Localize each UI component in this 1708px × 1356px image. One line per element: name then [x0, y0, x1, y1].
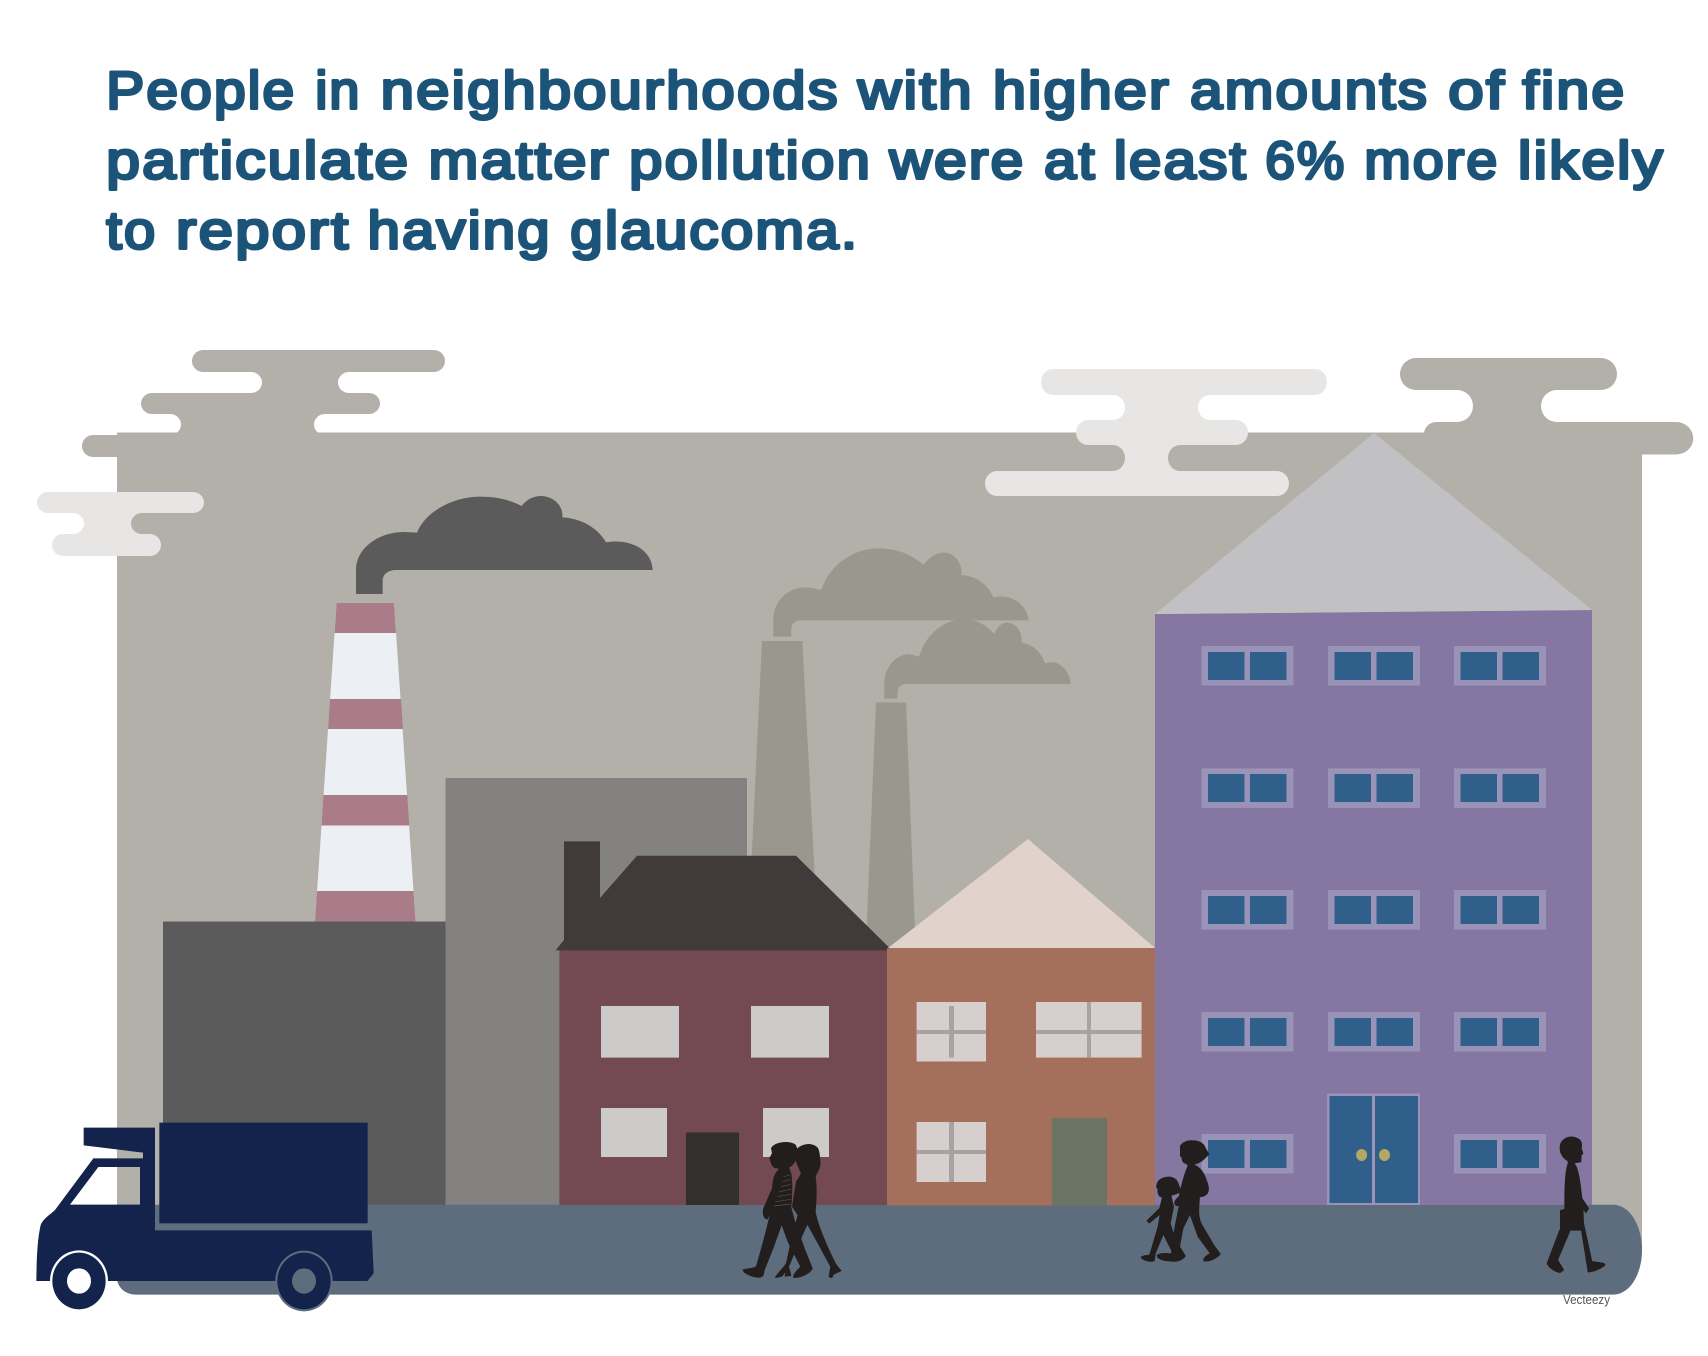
people: two women walking	[743, 1143, 841, 1277]
chimney	[564, 841, 600, 949]
title: likely	[1518, 132, 1665, 190]
roof: apartment	[1155, 433, 1592, 614]
title: particulate	[106, 132, 410, 190]
title: at	[1044, 132, 1097, 190]
person: man walking with briefcase	[1547, 1137, 1605, 1272]
title: least	[1114, 132, 1248, 190]
people: mother and child walking	[1141, 1141, 1220, 1261]
windows: apartment	[1202, 646, 1546, 1174]
striped top	[774, 1175, 791, 1206]
smoke: back plume two	[884, 619, 1071, 699]
roof: pale pink	[888, 839, 1155, 948]
credit: Vecteezy	[1563, 1292, 1610, 1307]
door: apartment double door	[1327, 1094, 1420, 1205]
door: red house	[686, 1132, 739, 1205]
house: tan brick	[887, 839, 1155, 1206]
title: with	[857, 62, 974, 120]
title: 6%	[1265, 132, 1346, 190]
title: more	[1364, 132, 1499, 190]
smokestack: back chimney, tall	[750, 641, 815, 880]
title: were	[888, 132, 1026, 190]
house: red brick	[556, 841, 892, 1205]
title: matter	[429, 132, 611, 190]
smokestack: striped chimney	[315, 603, 416, 922]
title: of	[1448, 62, 1506, 120]
smoke: back plume one	[773, 548, 1029, 637]
road	[117, 1205, 1642, 1295]
factory block: mid grey	[446, 778, 747, 1208]
title: amounts	[1190, 62, 1429, 120]
title: pollution	[629, 132, 872, 190]
cloud: grey upper left	[82, 350, 445, 457]
truck cargo box	[159, 1123, 368, 1223]
cloud: white centre	[985, 369, 1327, 496]
truck body and cab	[36, 1128, 374, 1281]
smoggy sky backdrop	[117, 432, 1642, 1250]
title: neighbourhoods	[381, 62, 840, 120]
windows: tan house	[917, 1002, 1142, 1182]
rear wheel	[275, 1251, 333, 1311]
smokestack: back chimney, short	[866, 702, 916, 955]
smoke: dark factory plume	[356, 496, 653, 594]
title: report	[176, 202, 350, 260]
title: to	[106, 202, 157, 260]
title: fine	[1522, 62, 1626, 120]
title: higher	[993, 62, 1171, 120]
title: People	[106, 62, 296, 120]
title	[106, 62, 1665, 260]
cloud: white left	[37, 492, 204, 556]
title: glaucoma.	[570, 202, 859, 260]
front wheel	[50, 1250, 108, 1312]
title: having	[368, 202, 552, 260]
title: in	[315, 62, 361, 120]
cloud: grey upper right	[1400, 358, 1693, 454]
roof: dark	[556, 856, 892, 950]
truck	[36, 1123, 374, 1312]
windows: red house	[601, 1006, 829, 1157]
apartment building	[1155, 433, 1592, 1205]
factory block: dark grey	[163, 922, 446, 1208]
door: tan house	[1052, 1118, 1107, 1206]
